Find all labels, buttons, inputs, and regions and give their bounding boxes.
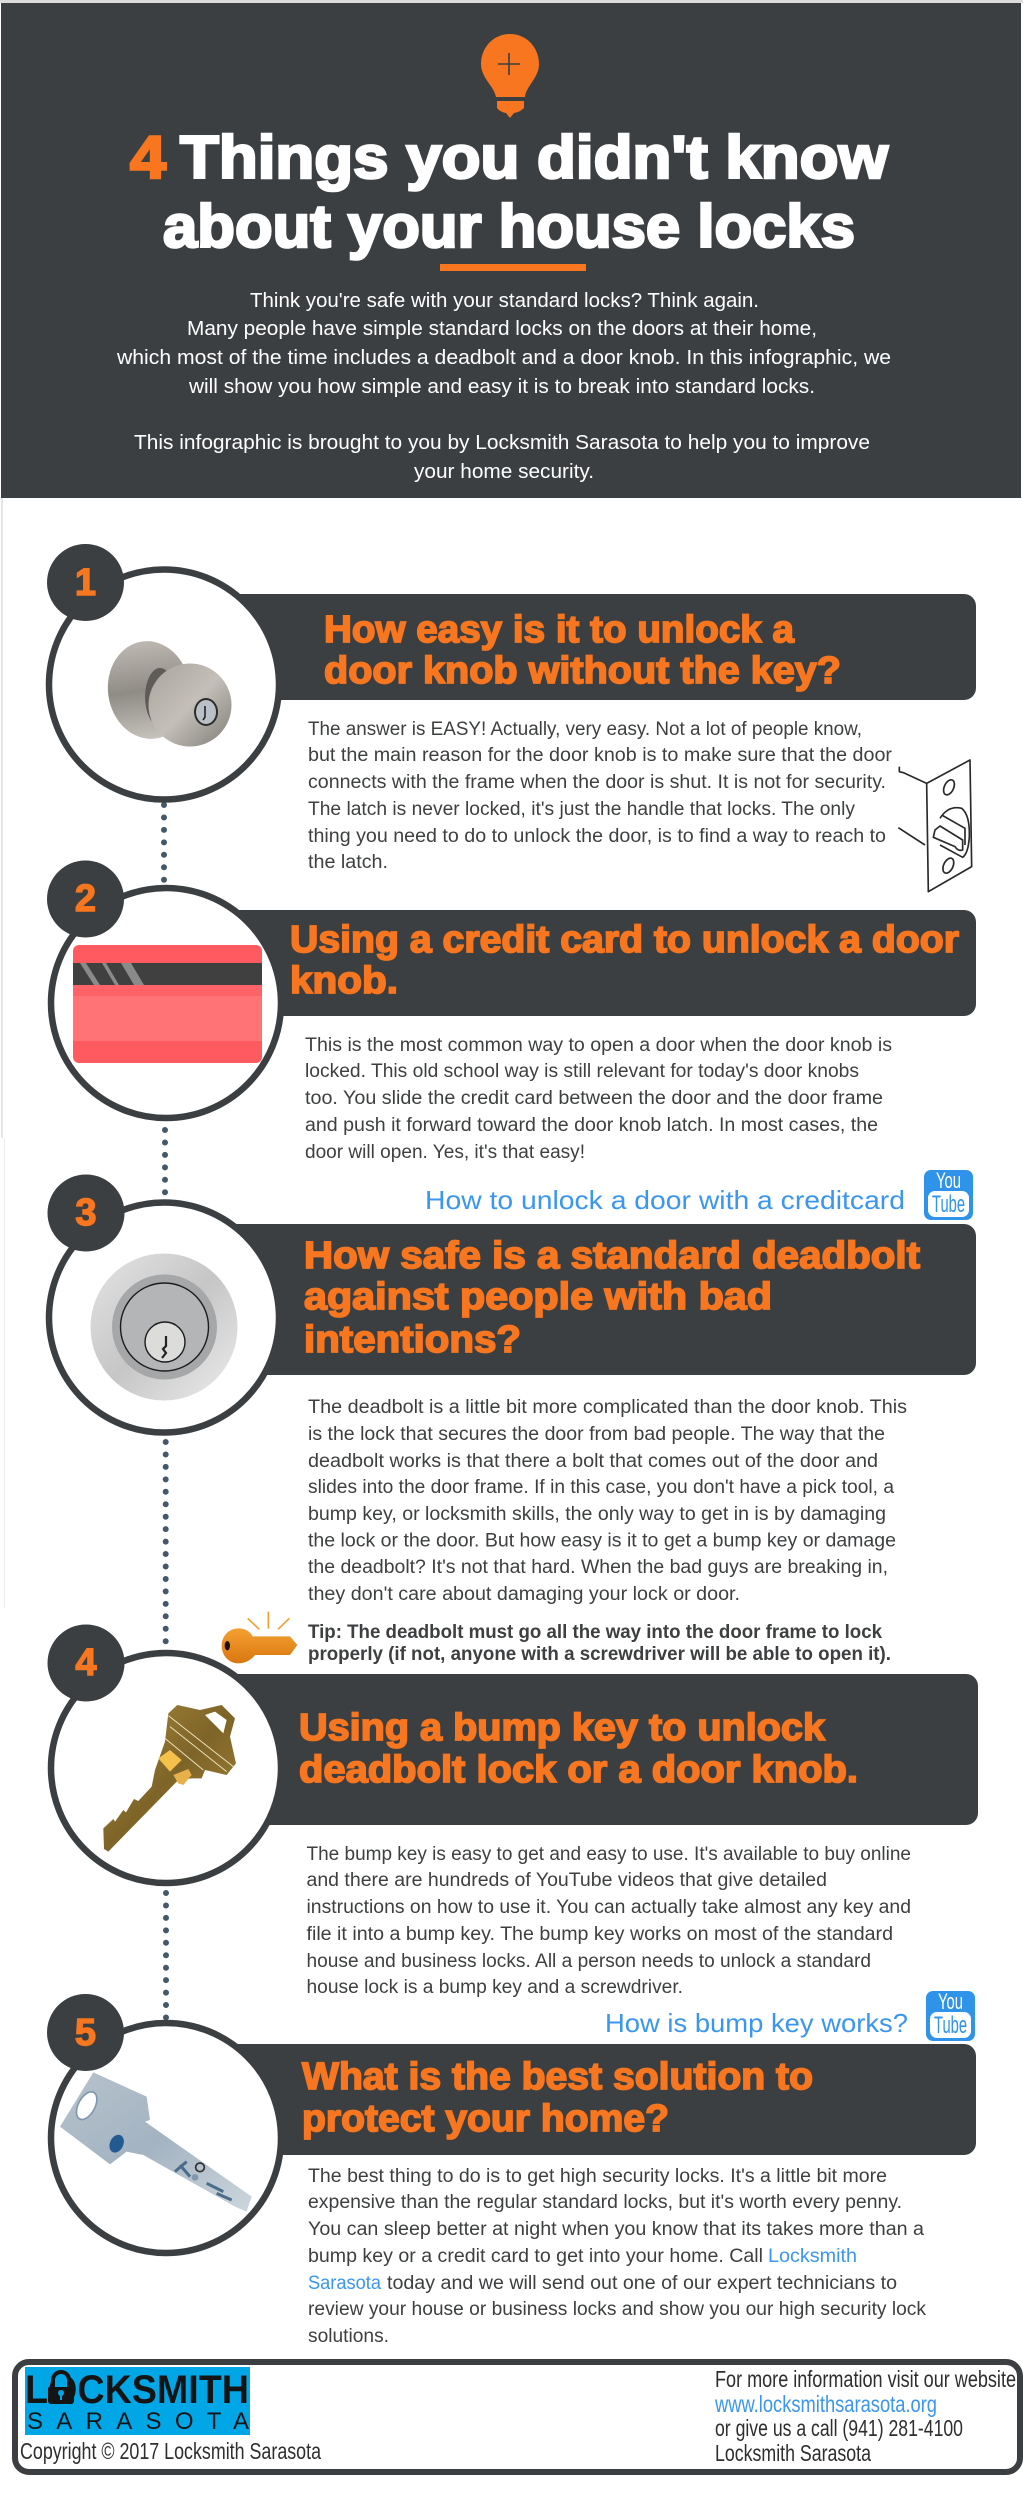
number badge 4 xyxy=(48,1624,124,1702)
logo: Locksmith Sarasota: LOCKSMITH xyxy=(25,2368,249,2412)
text block 4: house and business locks. All a person needs to unlock a standard xyxy=(306,1951,871,1972)
text block: introduction: will show you how simple and easy it is to break into standard locks. xyxy=(188,376,815,398)
text block 5: review your house or business locks and show you our high security lock xyxy=(308,2299,926,2320)
number badge 1 xyxy=(47,544,124,621)
text block 1: thing you need to do to unlock the door, is to find a way to reach to xyxy=(308,826,886,847)
icon: YouTube 1: Tube xyxy=(932,1191,965,1218)
text block 2: locked. This old school way is still relevant for today's door knobs xyxy=(305,1061,859,1082)
icon: orange key xyxy=(222,1612,297,1663)
title: about your house locks xyxy=(163,193,855,260)
icon: YouTube 2 xyxy=(926,1989,975,2041)
icon: door latch diagram xyxy=(898,760,972,892)
text block: introduction: This infographic is brought to you by Locksmith Sarasota to help you to improve xyxy=(134,432,870,454)
link: credit card video: How to unlock a door with a creditcard xyxy=(425,1185,905,1215)
text block 2: This is the most common way to open a door when the door knob is xyxy=(305,1035,892,1056)
logo: Locksmith Sarasota xyxy=(25,2367,250,2435)
text block 5: The best thing to do is to get high security locks. It's a little bit more xyxy=(308,2166,887,2187)
panel: header xyxy=(1,3,1021,498)
heading banner 1 xyxy=(200,594,976,700)
title: Things you didn't know xyxy=(180,124,888,191)
heading banner 2: knob. xyxy=(290,960,398,1002)
text block: introduction: your home security. xyxy=(414,461,594,483)
text block 3: bump key, or locksmith skills, the only way to get in is by damaging xyxy=(308,1504,886,1525)
text block 1: The answer is EASY! Actually, very easy. Not a lot of people know, xyxy=(308,719,862,740)
number badge 3: 3 xyxy=(75,1192,97,1234)
heading banner 5: protect your home? xyxy=(302,2098,669,2140)
text block 2: door will open. Yes, it's that easy! xyxy=(305,1142,585,1163)
text block 4: The bump key is easy to get and easy to use. It's available to buy online xyxy=(306,1844,911,1865)
heading banner 2 xyxy=(200,910,976,1016)
text block 5: You can sleep better at night when you know that its takes more than a xyxy=(308,2219,924,2240)
panel: section 5 xyxy=(47,1994,976,2347)
text block 1: connects with the frame when the door is shut. It is not for security. xyxy=(308,772,886,793)
text block 5: bump key or a credit card to get into your home. Call xyxy=(308,2246,763,2267)
icon: YouTube 1 xyxy=(924,1168,973,1220)
heading banner 3: intentions? xyxy=(304,1319,521,1361)
icon: YouTube 2: Tube xyxy=(934,2012,967,2039)
text block 1 xyxy=(308,719,893,873)
text block 5: Locksmith xyxy=(768,2246,857,2267)
heading banner 2: Using a credit card to unlock a door xyxy=(290,919,959,961)
image circle 5: high security key xyxy=(51,2023,281,2253)
heading banner 4 xyxy=(200,1674,978,1825)
image circle 3: deadbolt xyxy=(49,1202,279,1432)
image circle 2: credit card xyxy=(51,888,281,1118)
text block 5: today and we will send out one of our expert technicians to xyxy=(387,2273,897,2294)
number badge 1: 1 xyxy=(75,562,96,604)
tip xyxy=(308,1622,891,1665)
text block: introduction: Think you're safe with your standard locks? Think again. xyxy=(250,290,759,312)
text block 2: and push it forward toward the door knob latch. In most cases, the xyxy=(305,1115,878,1136)
title: 4 xyxy=(130,124,167,191)
text block 3: The deadbolt is a little bit more complicated than the door knob. This xyxy=(308,1397,907,1418)
contact information: Locksmith Sarasota xyxy=(715,2440,871,2466)
text block 5: solutions. xyxy=(308,2326,389,2347)
copyright: Copyright © 2017 Locksmith Sarasota xyxy=(20,2438,321,2464)
text block: introduction xyxy=(116,290,891,483)
text block 4: file it into a bump key. The bump key works on most of the standard xyxy=(306,1924,893,1945)
text block 3 xyxy=(308,1397,907,1605)
icon: light bulb xyxy=(481,34,539,118)
text block 5: Sarasota xyxy=(308,2273,381,2294)
text block 5: expensive than the regular standard locks, but it's worth every penny. xyxy=(308,2192,902,2213)
text block 3: slides into the door frame. If in this case, you don't have a pick tool, a xyxy=(308,1477,894,1498)
text block 1: The latch is never locked, it's just the handle that locks. The only xyxy=(308,799,856,820)
title xyxy=(130,124,888,260)
text block 2 xyxy=(305,1035,892,1163)
logo: Locksmith Sarasota: SARASOTA xyxy=(27,2408,249,2435)
text block: introduction: which most of the time includes a deadbolt and a door knob. In this infographic, we xyxy=(116,347,891,369)
text block 3: they don't care about damaging your lock or door. xyxy=(308,1584,740,1605)
text block 3: the lock or the door. But how easy is it to get a bump key or damage xyxy=(308,1530,896,1552)
number badge 2 xyxy=(47,860,124,938)
text block 4: and there are hundreds of YouTube videos that give detailed xyxy=(306,1870,827,1891)
number badge 4: 4 xyxy=(75,1642,97,1684)
panel: section 3 xyxy=(48,1174,976,1665)
panel: footer xyxy=(15,2362,1020,2472)
number badge 5: 5 xyxy=(75,2012,96,2054)
number badge 2: 2 xyxy=(75,878,96,920)
text block 4: instructions on how to use it. You can actually take almost any key and xyxy=(306,1897,911,1918)
tip: properly (if not, anyone with a screwdriver will be able to open it). xyxy=(308,1644,891,1665)
heading banner 3: against people with bad xyxy=(304,1276,772,1318)
link: bump key video: How is bump key works? xyxy=(605,2008,908,2038)
heading banner 4: deadbolt lock or a door knob. xyxy=(299,1749,858,1791)
contact information: www.locksmithsarasota.org xyxy=(714,2391,937,2417)
image circle 4: bump key xyxy=(51,1653,281,1883)
text block 1: but the main reason for the door knob is to make sure that the door xyxy=(308,745,893,766)
text block 5 xyxy=(308,2166,926,2347)
text block 1: the latch. xyxy=(308,852,388,873)
image circle 1: door knob xyxy=(49,570,279,800)
panel: section 2 xyxy=(47,860,976,1220)
text block: introduction: Many people have simple standard locks on the doors at their home, xyxy=(187,318,817,340)
heading banner 5 xyxy=(200,2044,976,2155)
text block 3: is the lock that secures the door from bad people. The way that the xyxy=(308,1424,885,1445)
heading banner 1: How easy is it to unlock a xyxy=(324,609,795,651)
icon: YouTube 1: You xyxy=(936,1168,961,1193)
number badge 3 xyxy=(48,1174,124,1252)
text block 2: too. You slide the credit card between the door and the door frame xyxy=(305,1088,883,1109)
text block 3: the deadbolt? It's not that hard. When the bad guys are breaking in, xyxy=(308,1557,888,1578)
text block 3: deadbolt works is that there a bolt that comes out of the door and xyxy=(308,1451,878,1472)
panel: section 1 xyxy=(47,544,976,892)
heading banner 1: door knob without the key? xyxy=(324,650,841,692)
heading banner 3 xyxy=(200,1224,976,1375)
number badge 5 xyxy=(47,1994,124,2071)
heading banner 5: What is the best solution to xyxy=(302,2056,813,2098)
heading banner 3: How safe is a standard deadbolt xyxy=(304,1235,920,1277)
heading banner 4: Using a bump key to unlock xyxy=(299,1707,826,1749)
text block 4 xyxy=(306,1844,911,1998)
tip: Tip: The deadbolt must go all the way into the door frame to lock xyxy=(308,1622,882,1643)
contact information xyxy=(714,2366,1016,2466)
text block 4: house lock is a bump key and a screwdriver. xyxy=(306,1977,683,1998)
icon: YouTube 2: You xyxy=(938,1989,963,2014)
panel: section 4 xyxy=(48,1624,978,2041)
